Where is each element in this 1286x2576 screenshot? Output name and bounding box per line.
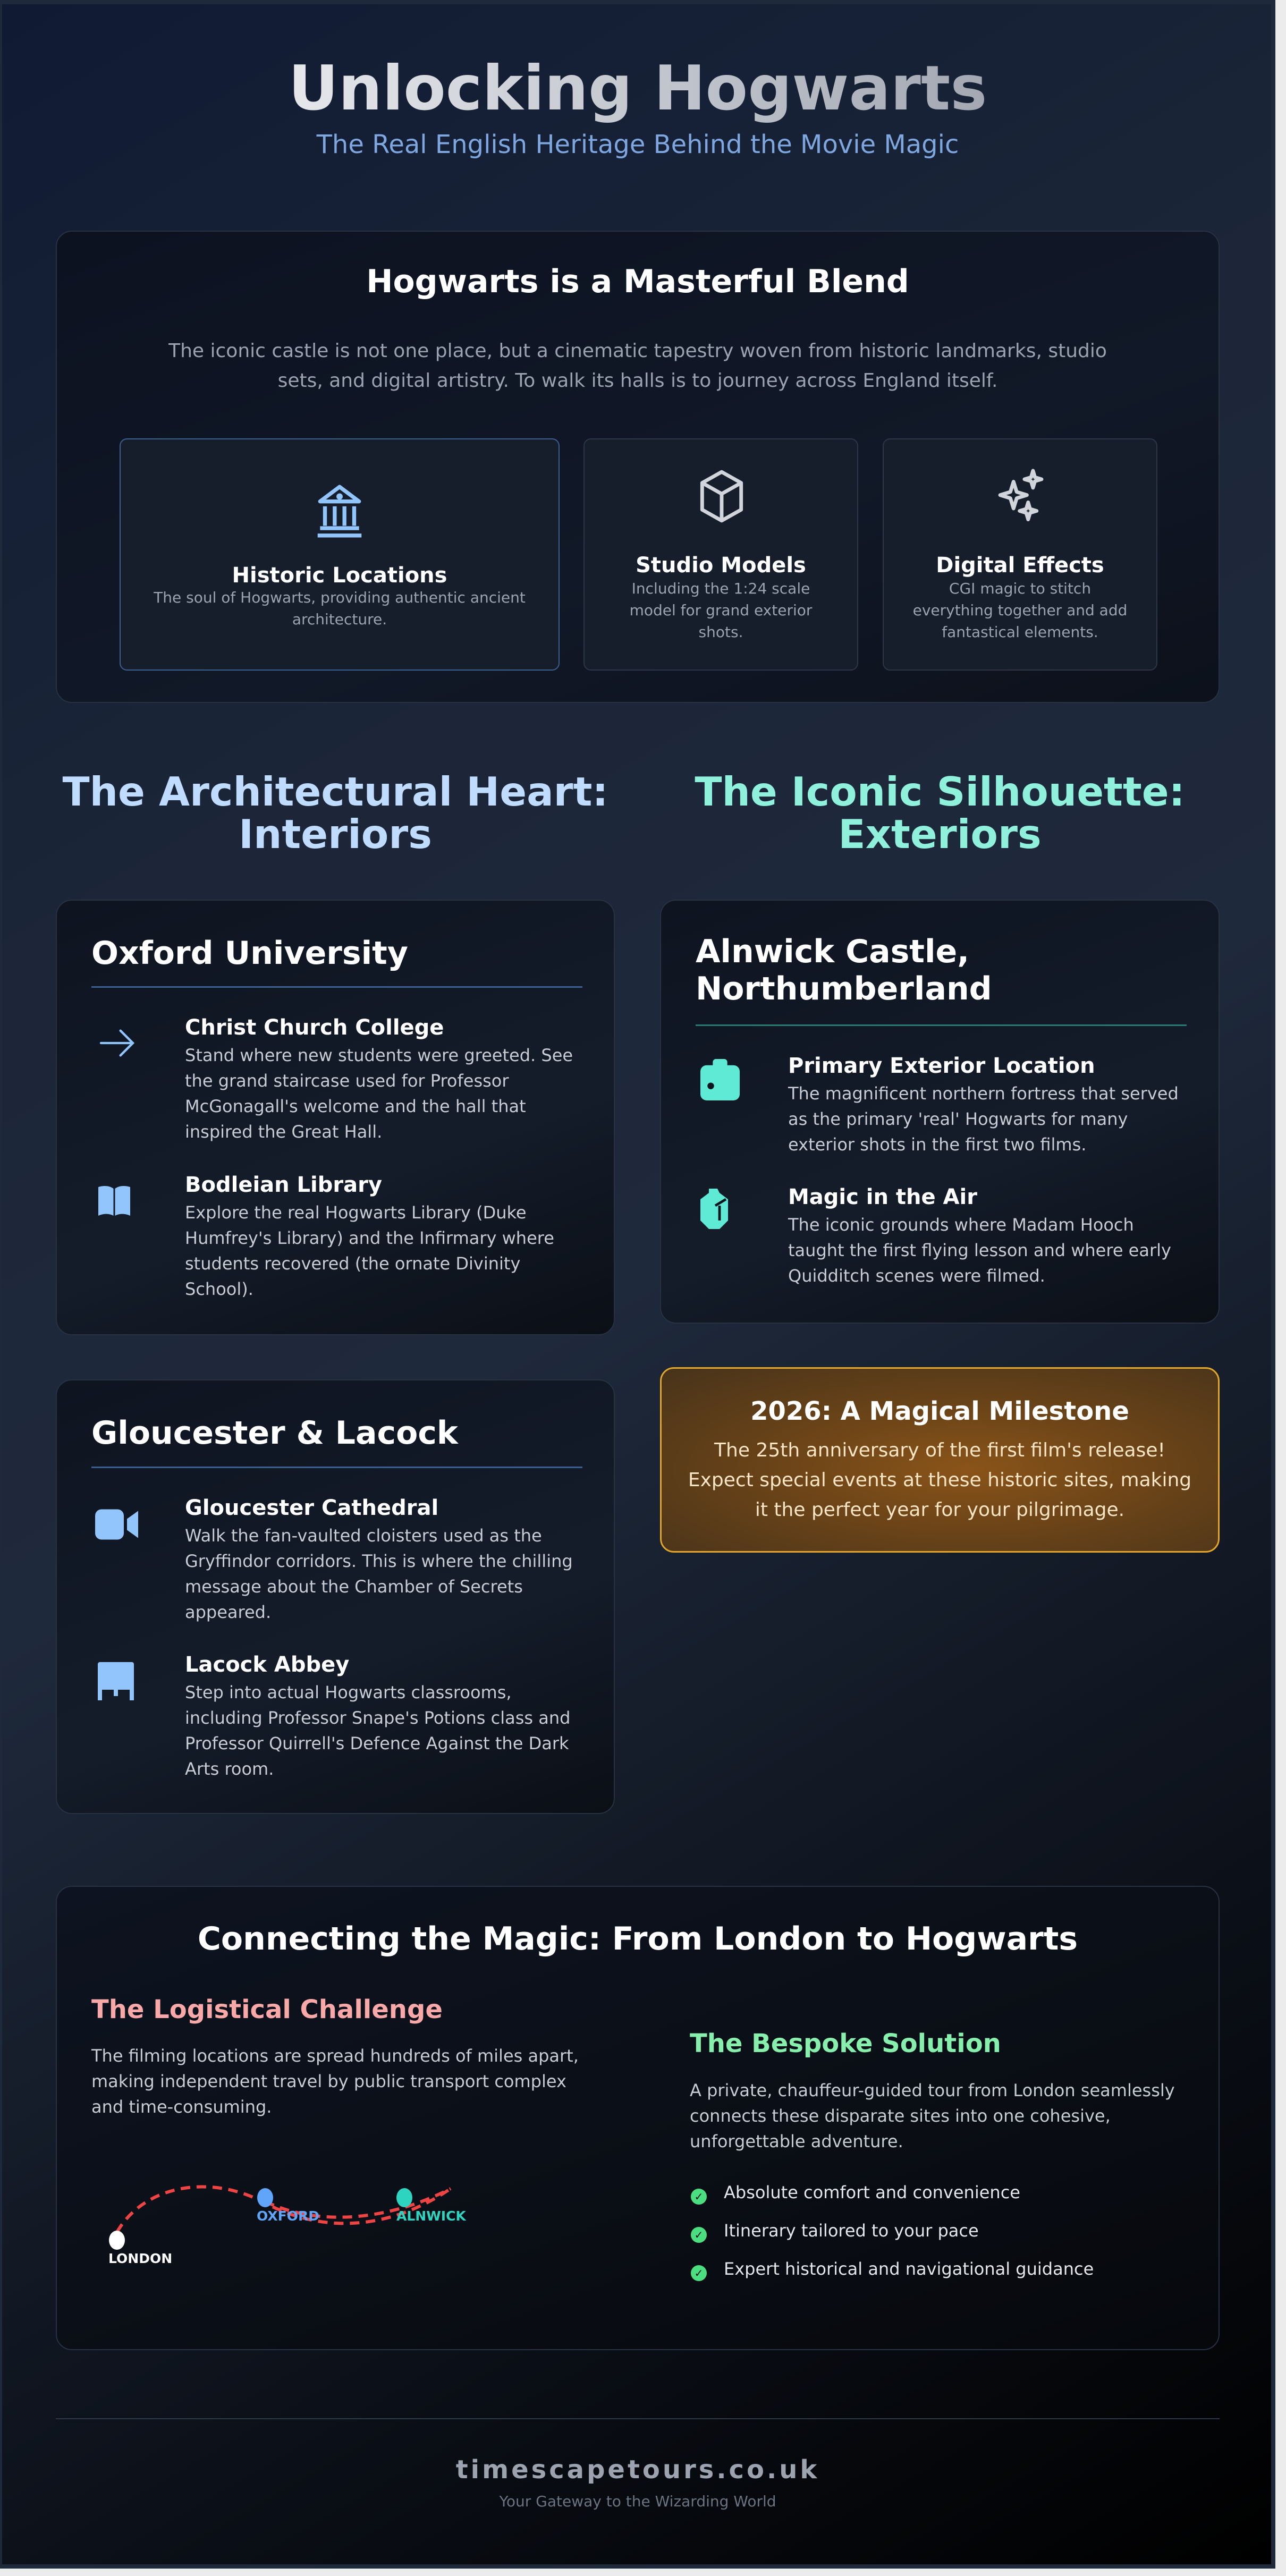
icon: book [98, 1186, 130, 1216]
heading: alnwick [696, 933, 992, 1007]
item: bodleian: students recovered (the ornate Divinity [185, 1253, 520, 1274]
footer [0, 2454, 1275, 2512]
icon: sparkles [998, 469, 1044, 521]
text: challenge: making independent travel by public transport complex [91, 2071, 566, 2091]
panel: gloucester & lacock [56, 1379, 615, 1814]
item: lacock abbey: Arts room. [185, 1759, 274, 1779]
route map: LONDON [108, 2251, 172, 2266]
heading: interiors: Interiors [239, 811, 432, 858]
label: studio models: Including the 1:24 scale [632, 580, 810, 597]
route map: OXFORD [257, 2208, 319, 2224]
label: digital effects: fantastical elements. [942, 623, 1098, 641]
item: christ church: Christ Church College [185, 1015, 444, 1040]
intro text: sets, and digital artistry. To walk its halls is to journey across England itself. [278, 370, 997, 392]
icon: castle tag [700, 1059, 740, 1100]
heading: alnwick: Alnwick Castle, [696, 933, 969, 970]
route map [57, 2153, 535, 2291]
card: digital effects [883, 438, 1157, 671]
label: historic locations: The soul of Hogwarts, providing authentic ancient [154, 589, 526, 606]
item: gloucester cathedral: Gloucester Cathedral [185, 1496, 438, 1520]
label: digital effects [913, 553, 1127, 641]
icon: video [95, 1509, 138, 1540]
item: primary exterior [788, 1053, 1179, 1157]
item: lacock abbey: Step into actual Hogwarts classrooms, [185, 1682, 512, 1702]
text: challenge: The filming locations are spread hundreds of miles apart, [91, 2046, 579, 2066]
checklist: ✓ [695, 2228, 703, 2241]
text: milestone: The 25th anniversary of the first film's release! [714, 1439, 1165, 1461]
item: gloucester cathedral: appeared. [185, 1602, 271, 1622]
item: christ church: Stand where new students were greeted. See [185, 1045, 573, 1065]
subtitle: The Real English Heritage Behind the Movie Magic [317, 130, 959, 159]
checklist: Itinerary tailored to your pace [724, 2221, 979, 2241]
checklist: ✓ [695, 2267, 703, 2280]
callout: 2026 milestone [660, 1367, 1220, 1553]
item: bodleian: Explore the real Hogwarts Library (Duke [185, 1202, 527, 1223]
item: lacock abbey [185, 1653, 570, 1779]
item: gloucester cathedral: message about the Chamber of Secrets [185, 1577, 523, 1597]
item: gloucester cathedral: Walk the fan-vaulted cloisters used as the [185, 1526, 542, 1546]
item: gloucester cathedral [185, 1496, 573, 1622]
route map: ALNWICK [396, 2208, 467, 2224]
text: challenge: and time-consuming. [91, 2097, 272, 2117]
label: studio models: Studio Models [636, 553, 806, 578]
item: magic in the air: Quidditch scenes were filmed. [788, 1266, 1045, 1286]
label: historic locations [154, 563, 526, 628]
panel: masterful blend [56, 231, 1220, 703]
item: bodleian: School). [185, 1279, 253, 1299]
heading: interiors: The Architectural Heart: [62, 768, 608, 815]
heading: oxford: Oxford University [91, 935, 408, 972]
item: lacock abbey: Lacock Abbey [185, 1653, 349, 1677]
icon: desk [98, 1662, 134, 1700]
item: gloucester cathedral: Gryffindor corridors. This is where the chilling [185, 1551, 573, 1571]
item: primary exterior: The magnificent northern fortress that served [788, 1083, 1179, 1104]
item: magic in the air: taught the first flying lesson and where early [788, 1240, 1171, 1260]
item: christ church: the grand staircase used for Professor [185, 1071, 509, 1091]
checklist [691, 2182, 1094, 2297]
item: magic in the air: Magic in the Air [788, 1185, 977, 1209]
label: studio models [630, 553, 812, 641]
item: bodleian [185, 1173, 554, 1299]
item: lacock abbey: including Professor Snape's Potions class and [185, 1708, 570, 1728]
text: challenge [91, 2043, 579, 2120]
item: primary exterior: Primary Exterior Location [788, 1054, 1095, 1078]
item: primary exterior: as the primary 'real' Hogwarts for many [788, 1109, 1128, 1129]
label: studio models: model for grand exterior [630, 601, 812, 619]
item: bodleian: Bodleian Library [185, 1173, 382, 1197]
label: digital effects: everything together and add [913, 601, 1127, 619]
heading: exteriors: The Iconic Silhouette: [695, 768, 1185, 815]
item: christ church: McGonagall's welcome and the hall that [185, 1096, 526, 1116]
panel: oxford [56, 900, 615, 1335]
checklist: ✓ [695, 2190, 703, 2203]
panel: alnwick [660, 900, 1220, 1324]
icon: building [318, 485, 361, 538]
card: historic locations [120, 438, 560, 671]
label: studio models: shots. [699, 623, 743, 641]
checklist: Absolute comfort and convenience [724, 2182, 1020, 2202]
text: milestone: Expect special events at these historic sites, making [688, 1469, 1191, 1491]
item: lacock abbey: Professor Quirrell's Defence Against the Dark [185, 1733, 569, 1753]
panel: connecting the magic [56, 1886, 1220, 2350]
heading: exteriors [695, 768, 1185, 858]
text: milestone: it the perfect year for your pilgrimage. [755, 1499, 1124, 1521]
intro text: The iconic castle is not one place, but a cinematic tapestry woven from historic landmarks, studio [168, 340, 1107, 362]
label: historic locations: architecture. [292, 611, 387, 628]
item: primary exterior: exterior shots in the first two films. [788, 1134, 1086, 1155]
item: magic in the air [788, 1184, 1171, 1289]
item: bodleian: Humfrey's Library) and the Infirmary where [185, 1228, 554, 1248]
heading: interiors [62, 768, 608, 858]
icon: broom [698, 1189, 732, 1229]
intro text [168, 340, 1107, 392]
heading: blend: Hogwarts is a Masterful Blend [366, 263, 909, 300]
label: digital effects: Digital Effects [936, 553, 1104, 578]
item: magic in the air: The iconic grounds where Madam Hooch [788, 1215, 1134, 1235]
heading: gloucester: Gloucester & Lacock [91, 1414, 458, 1452]
icon: arrow [100, 1030, 134, 1056]
footer: Your Gateway to the Wizarding World [499, 2493, 776, 2510]
label: digital effects: CGI magic to stitch [949, 580, 1091, 597]
text: solution: A private, chauffeur-guided tour from London seamlessly [690, 2080, 1175, 2100]
text: solution: unforgettable adventure. [690, 2131, 903, 2151]
text: solution [690, 2078, 1175, 2154]
heading: alnwick: Northumberland [696, 970, 992, 1007]
text: solution: connects these disparate sites into one cohesive, [690, 2106, 1111, 2126]
icon: cube [700, 470, 743, 523]
footer: timescapetours.co.uk [456, 2455, 819, 2485]
heading: milestone: 2026: A Magical Milestone [750, 1396, 1129, 1426]
item: christ church: inspired the Great Hall. [185, 1122, 382, 1142]
label: historic locations: Historic Locations [232, 563, 447, 588]
text: milestone [662, 1436, 1218, 1525]
title: Unlocking Hogwarts [289, 53, 987, 124]
card: studio models [583, 438, 858, 671]
heading: exteriors: Exteriors [838, 811, 1042, 858]
item: christ church [185, 1015, 573, 1142]
checklist: Expert historical and navigational guidance [724, 2259, 1094, 2279]
heading: connecting: Connecting the Magic: From London to Hogwarts [198, 1920, 1078, 1958]
subheading: solution: The Bespoke Solution [690, 2029, 1001, 2058]
subheading: challenge: The Logistical Challenge [91, 1995, 443, 2024]
